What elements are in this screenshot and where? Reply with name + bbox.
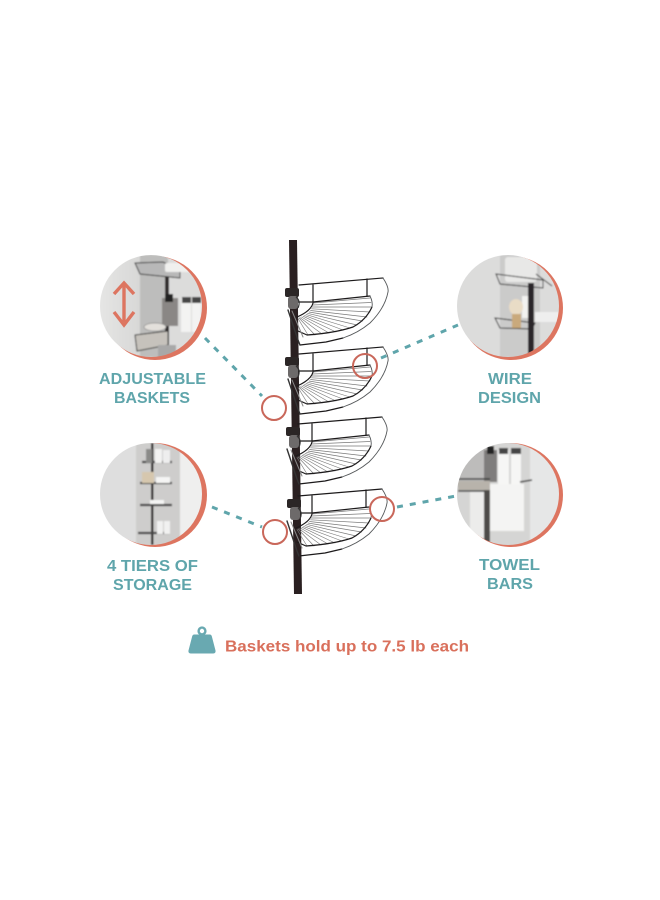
callout: adjustable baskets connector bbox=[205, 338, 286, 420]
icon: weight bbox=[188, 628, 216, 654]
label: wire design: WIRE bbox=[488, 371, 532, 388]
label: adjustable baskets: BASKETS bbox=[114, 390, 190, 407]
callout: towel bars connector bbox=[370, 496, 456, 521]
label: wire design: DESIGN bbox=[478, 390, 541, 407]
label: adjustable baskets: ADJUSTABLE bbox=[99, 371, 206, 388]
pole bbox=[289, 240, 302, 594]
label: wire design bbox=[478, 371, 541, 407]
photo: 4 tiers of storage bbox=[98, 441, 207, 547]
icon: adjust arrow bbox=[114, 283, 134, 325]
basket tier 1 bbox=[285, 278, 388, 345]
label: adjustable baskets bbox=[99, 371, 206, 407]
infographic bbox=[100, 240, 563, 655]
photo: wire design bbox=[455, 253, 563, 360]
label: 4 tiers of storage bbox=[107, 558, 198, 594]
callout: 4 tiers connector bbox=[212, 507, 287, 544]
weight capacity note: Baskets hold up to 7.5 lb each bbox=[225, 638, 469, 656]
basket tier 4 bbox=[287, 489, 387, 556]
label: 4 tiers of storage: 4 TIERS OF bbox=[107, 558, 198, 575]
shelf product illustration bbox=[285, 240, 388, 594]
photo: towel bars bbox=[455, 441, 563, 547]
basket tier 2 bbox=[285, 347, 388, 414]
label: 4 tiers of storage: STORAGE bbox=[113, 577, 192, 594]
callout: wire design connector bbox=[353, 325, 458, 378]
basket tier 3 bbox=[286, 417, 387, 484]
label: towel bars bbox=[479, 557, 540, 593]
label: towel bars: TOWEL bbox=[479, 557, 540, 574]
label: towel bars: BARS bbox=[487, 576, 533, 593]
photo: adjustable baskets bbox=[98, 253, 207, 360]
